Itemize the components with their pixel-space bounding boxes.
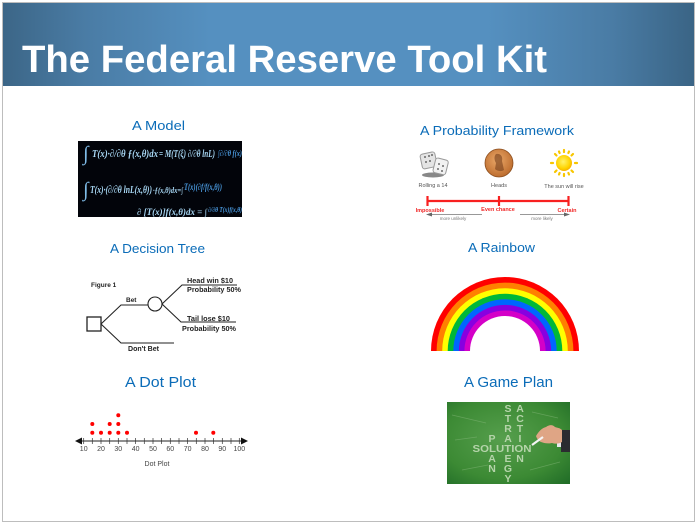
image: chalkboard with crossword: S [504, 403, 512, 415]
probability scale: Even chance [481, 207, 515, 213]
image: equations on blackboard: ·ƒ(x,θ)dx=∫ [153, 186, 184, 195]
image: chalkboard with crossword: R [504, 423, 512, 435]
image: equations on blackboard: ∫∂/∂θ f(x) [217, 149, 242, 158]
image: equations on blackboard: ∫ [82, 179, 90, 202]
header banner [3, 3, 694, 86]
dot plot chart: 50 [149, 446, 157, 453]
heading: a model: A Model [132, 118, 185, 133]
dot plot chart: 20 [97, 446, 105, 453]
image: chalkboard with crossword: Y [504, 473, 512, 485]
image: chalkboard with crossword: N [488, 463, 496, 475]
dot plot chart: 70 [184, 446, 192, 453]
decision tree diagram: Tail lose $10 [187, 316, 230, 323]
image: chalkboard with crossword: I [519, 433, 522, 445]
captions: Rolling a 14 [418, 183, 448, 189]
image: chalkboard with crossword: E [504, 453, 512, 465]
panel: a game plan [447, 374, 570, 485]
icon: sun [551, 150, 577, 176]
title: The Federal Reserve Tool Kit [22, 39, 547, 81]
image: equations on blackboard: ∫ [82, 143, 90, 166]
image: chalkboard with crossword: G [504, 463, 512, 475]
image: equations on blackboard: = M(T(ξ) ∂/∂θ lnL) [159, 149, 215, 160]
image: chalkboard with crossword: A [516, 403, 524, 415]
probability scale: more likely [531, 216, 553, 221]
decision tree diagram: Don't Bet [128, 346, 160, 353]
dot plot chart: 80 [201, 446, 209, 453]
image: chalkboard with crossword: A [504, 433, 512, 445]
decision tree diagram: Figure 1 [91, 282, 117, 289]
image: chalkboard with crossword: C [516, 413, 524, 425]
image: chalkboard with crossword: N [516, 453, 524, 465]
heading: a probability framework: A Probability Framework [420, 123, 575, 138]
dot plot chart: 10 [80, 446, 88, 453]
decision tree diagram [87, 278, 242, 353]
dot plot chart: 40 [132, 446, 140, 453]
heading: a dot plot: A Dot Plot [125, 374, 197, 391]
captions: The sun will rise [544, 184, 584, 190]
image: equations on blackboard: T(x)·(∂/∂θ lnL(x,θ)) [90, 184, 152, 196]
heading: a rainbow: A Rainbow [468, 240, 536, 255]
heading: a game plan: A Game Plan [464, 374, 553, 391]
image: chalkboard with crossword: T [517, 423, 524, 435]
panel: a probability framework [416, 123, 584, 221]
dot plot chart [75, 413, 248, 468]
captions: Heads [491, 183, 507, 189]
hand with chalk [532, 425, 570, 452]
probability scale: Impossible [416, 208, 444, 214]
dot plot chart: 60 [166, 446, 174, 453]
image: chalkboard with crossword: A [488, 453, 496, 465]
decision tree diagram: Probability 50% [187, 287, 242, 294]
image: chalkboard with crossword [447, 402, 570, 485]
panel: a decision tree [87, 241, 242, 353]
decision tree diagram: Probability 50% [182, 326, 237, 333]
dot plot chart: Dot Plot [145, 461, 170, 468]
probability scale: more unlikely [440, 216, 467, 221]
image: chalkboard with crossword: SOLUTION [472, 443, 532, 455]
icon: penny [485, 149, 513, 177]
icon: dice [420, 151, 449, 178]
image: chalkboard with crossword: P [488, 433, 496, 445]
panel: a dot plot [75, 374, 248, 468]
image: equations on blackboard: T(x)·∂/∂θ ƒ(x,θ)dx [92, 148, 158, 160]
dot plot chart: 30 [114, 446, 122, 453]
image: equations on blackboard: T(x)(∂f/f(x,θ)) [184, 182, 222, 192]
captions [418, 183, 584, 190]
image: chalkboard with crossword: T [505, 413, 512, 425]
dot plot chart: 100 [233, 446, 245, 453]
rainbow illustration [431, 277, 579, 351]
decision tree diagram: Head win $10 [187, 278, 233, 285]
panel: a model [78, 118, 242, 218]
panel: a rainbow [431, 240, 579, 351]
decision tree diagram: Bet [126, 297, 137, 304]
probability scale [416, 196, 577, 221]
probability scale: Certain [558, 208, 577, 214]
image: equations on blackboard [78, 141, 242, 218]
heading: a decision tree: A Decision Tree [110, 241, 205, 256]
image: equations on blackboard: ∂/∂θ T(x)f(x,θ) [208, 206, 242, 214]
image: equations on blackboard: ∂ [T(x)]f(x,θ)dx = ∫ [137, 207, 209, 218]
dot plot chart: 90 [218, 446, 226, 453]
